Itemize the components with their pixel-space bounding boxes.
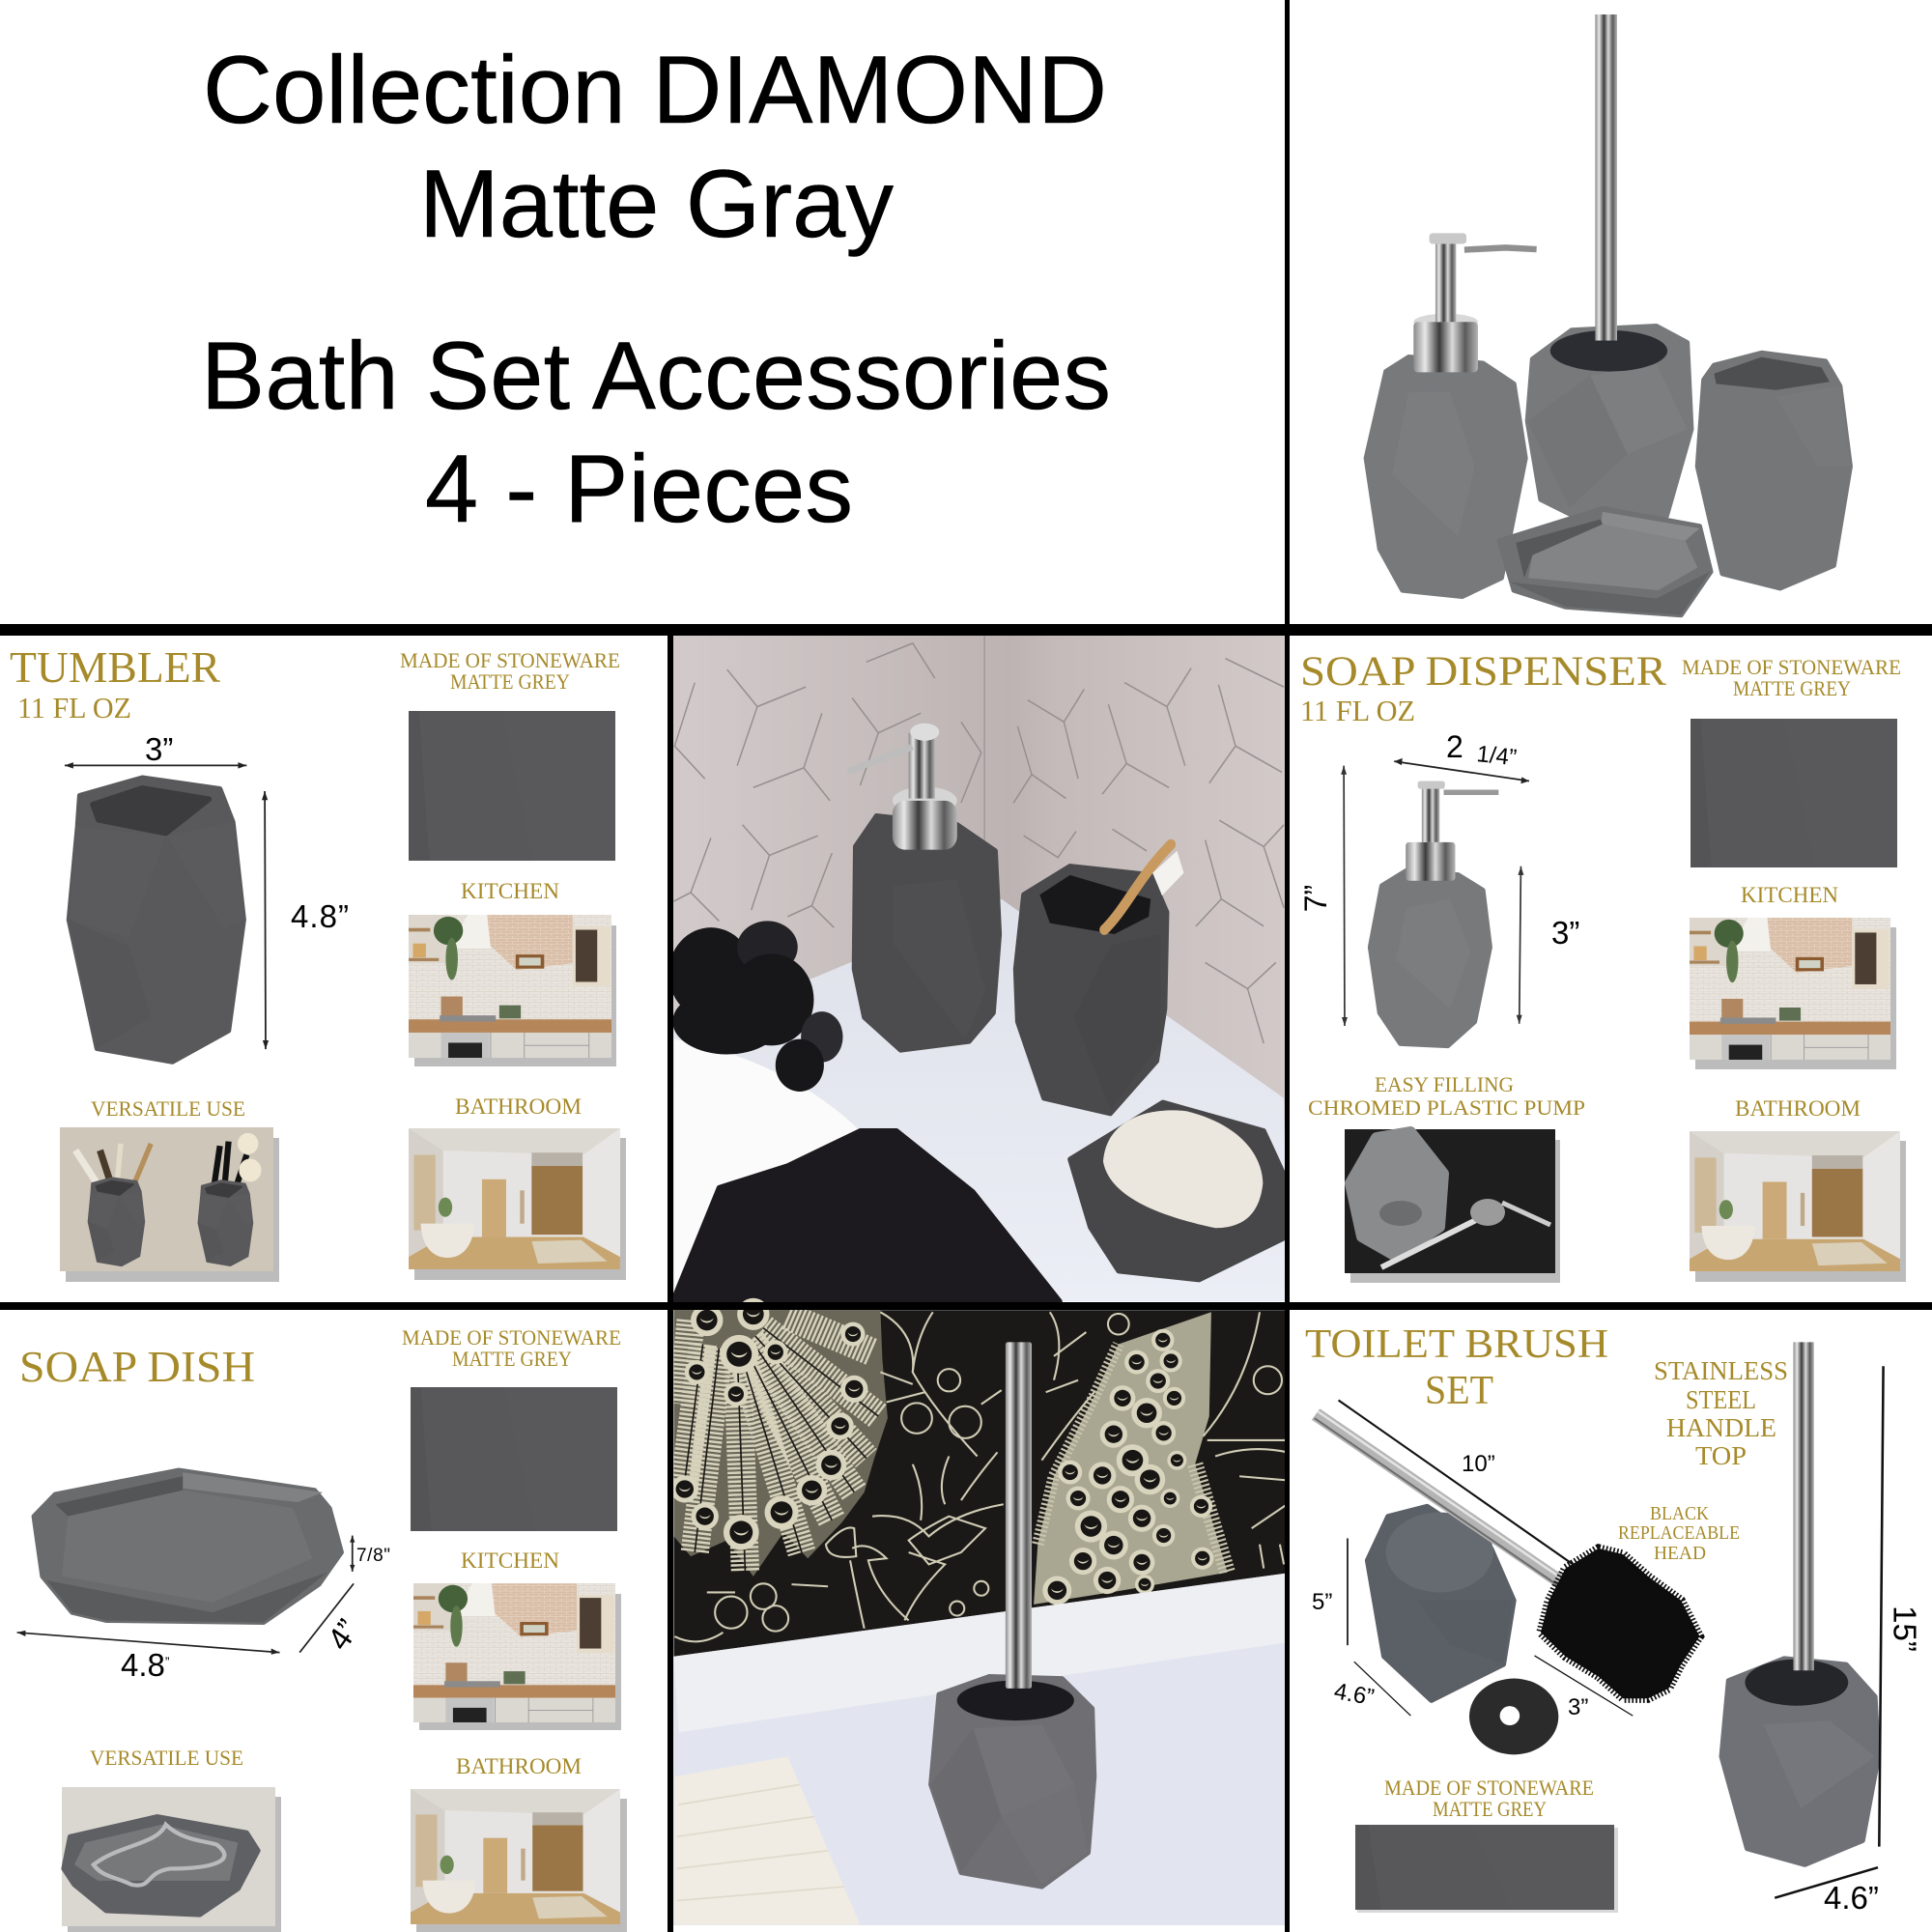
- label: black replaceable head: REPLACEABLE: [1618, 1522, 1740, 1544]
- label: material: MADE OF STONEWARE: [402, 1325, 621, 1350]
- photo: kitchen: [1690, 918, 1896, 1069]
- dimension: height: 4.8”: [291, 898, 349, 934]
- dimension: 15 inch: 15”: [1888, 1605, 1922, 1652]
- label: black replaceable head: BLACK: [1650, 1503, 1709, 1524]
- photo: kitchen: [413, 1583, 621, 1730]
- label: stainless steel handle top: STAINLESS: [1654, 1356, 1788, 1385]
- dispenser: [848, 724, 1000, 1050]
- photo: bathroom: [1690, 1131, 1906, 1282]
- dimension: depth: 4”: [320, 1612, 366, 1657]
- holder, standing: [1721, 1342, 1878, 1864]
- heading: SOAP DISH: SOAP DISH: [19, 1343, 255, 1391]
- photo: soap dish with jewellery: [62, 1787, 281, 1932]
- swatch: matte grey: [409, 711, 615, 861]
- dimension: body height: 3”: [1551, 915, 1579, 951]
- photo: bathroom: [409, 1128, 626, 1280]
- swatch: matte grey: [411, 1387, 617, 1531]
- photo: bathroom: [411, 1789, 627, 1932]
- dimension: rim height: 7/8": [356, 1546, 390, 1566]
- dimension: 3 inch: 3”: [1568, 1694, 1588, 1720]
- title line: Matte Gray: Matte Gray: [419, 150, 894, 257]
- heading: TUMBLER: TUMBLER: [10, 642, 220, 692]
- subtitle line: Bath Set Accessories: Bath Set Accessories: [201, 322, 1111, 429]
- bath mat: [674, 1756, 860, 1924]
- bath puff: [668, 921, 843, 1092]
- label: kitchen: KITCHEN: [1741, 883, 1838, 907]
- label: chromed plastic pump: CHROMED PLASTIC PUMP: [1308, 1095, 1585, 1120]
- product: toilet brush in holder: [1527, 14, 1691, 516]
- label: versatile use: VERSATILE USE: [91, 1096, 245, 1121]
- label: colour: MATTE GREY: [452, 1347, 572, 1371]
- label: black replaceable head: HEAD: [1654, 1543, 1706, 1564]
- tumbler product and dimension arrows: [65, 762, 269, 1062]
- dimension: length: ”: [165, 1654, 170, 1669]
- label: versatile use: VERSATILE USE: [90, 1746, 243, 1770]
- panel: lifestyle photo soap dispenser, tumbler and dish: [668, 636, 1288, 1301]
- label: material: MADE OF STONEWARE: [1384, 1776, 1594, 1800]
- label: material: MADE OF STONEWARE: [1682, 655, 1901, 679]
- label: kitchen: KITCHEN: [461, 879, 559, 903]
- panel: soap dispenser details: [1298, 649, 1906, 1283]
- sink: [674, 1039, 868, 1301]
- panel: tumbler details: [10, 642, 626, 1282]
- product: tumbler: [1697, 353, 1850, 588]
- label: kitchen: KITCHEN: [461, 1548, 559, 1573]
- counter top: [674, 899, 1288, 1301]
- label: stainless steel handle top: TOP: [1695, 1441, 1747, 1470]
- label: stainless steel handle top: [1654, 1356, 1788, 1470]
- botanical linework: [674, 1312, 1287, 1641]
- title line: Collection DIAMOND: Collection DIAMOND: [203, 36, 1107, 143]
- panel: soap dish details: [17, 1325, 627, 1932]
- heading: SOAP DISPENSER: SOAP DISPENSER: [1300, 649, 1666, 695]
- capacity: 11 FL OZ: 11 FL OZ: [17, 691, 131, 724]
- dispenser product and dimension arrows: [1341, 758, 1529, 1045]
- dimension: 4.6 inch standing: 4.6”: [1824, 1880, 1879, 1916]
- peacock body right: [1034, 1312, 1228, 1605]
- label: stainless steel handle top: STEEL: [1686, 1385, 1756, 1414]
- product: soap dispenser: [1366, 233, 1537, 596]
- brush handle: [1315, 1411, 1563, 1586]
- label: colour: MATTE GREY: [1433, 1797, 1547, 1821]
- product: soap dish: [1499, 508, 1711, 615]
- dimension: total height: 7”: [1298, 885, 1333, 912]
- label: material: MADE OF STONEWARE: [400, 648, 620, 672]
- label: colour: MATTE GREY: [1733, 676, 1851, 700]
- title block: [201, 36, 1111, 542]
- dimension: width: 2: [1446, 729, 1463, 764]
- wallpaper: [674, 1310, 1287, 1657]
- photo: tumblers in use: [60, 1127, 279, 1282]
- dimension: length: 4.8: [121, 1647, 165, 1683]
- photo: easy filling pump: [1345, 1129, 1560, 1283]
- label: bathroom: BATHROOM: [455, 1094, 582, 1119]
- base disc: [1469, 1679, 1558, 1754]
- brush head: [1541, 1548, 1699, 1698]
- dimension: 4.6 inch holder: 4.6”: [1332, 1678, 1376, 1711]
- counter: [674, 1642, 1287, 1924]
- panel: toilet brush details: [1305, 1322, 1922, 1916]
- ledge: [674, 1574, 1287, 1733]
- label: stainless steel handle top: HANDLE: [1666, 1413, 1776, 1442]
- dimension: 5 inch: 5”: [1312, 1589, 1332, 1615]
- heading: SET: SET: [1425, 1369, 1493, 1413]
- dimension lines: [1339, 1366, 1884, 1898]
- subtitle line: 4 - Pieces: 4 - Pieces: [425, 435, 853, 542]
- capacity: 11 FL OZ: 11 FL OZ: [1300, 694, 1415, 727]
- heading: TOILET BRUSH: TOILET BRUSH: [1305, 1322, 1608, 1367]
- label: easy filling: EASY FILLING: [1375, 1072, 1514, 1096]
- tumbler with toothbrush: [1015, 844, 1183, 1114]
- photo: kitchen: [409, 915, 616, 1066]
- peacock eyes left: [671, 1298, 867, 1550]
- soap dish product and dimension lines: [17, 1470, 355, 1655]
- soap dish with soap: [1070, 1102, 1284, 1280]
- label: black replaceable head: [1618, 1503, 1740, 1564]
- panel: hero photo of the four pieces: [1366, 14, 1850, 615]
- disassembled brush set and standing brush: [1315, 1342, 1884, 1898]
- label: bathroom: BATHROOM: [456, 1754, 582, 1778]
- holder, open: [1367, 1506, 1514, 1700]
- dimension: width fraction: 1/4”: [1475, 741, 1518, 771]
- swatch: matte grey: [1355, 1825, 1618, 1913]
- dimension: width: 3”: [145, 731, 173, 767]
- panel: lifestyle photo toilet brush with peacock wallpaper: [671, 1298, 1287, 1925]
- label: bathroom: BATHROOM: [1735, 1096, 1861, 1121]
- towel: [672, 1131, 1060, 1301]
- dimension: 10 inch: 10”: [1462, 1451, 1495, 1477]
- peacock eyes right: [1042, 1329, 1213, 1605]
- brush holder and handle: [931, 1342, 1094, 1887]
- label: colour: MATTE GREY: [450, 669, 570, 694]
- swatch: matte grey: [1690, 719, 1897, 867]
- peacock tail left: [674, 1310, 888, 1577]
- wall hexagon pattern: [674, 636, 1284, 1043]
